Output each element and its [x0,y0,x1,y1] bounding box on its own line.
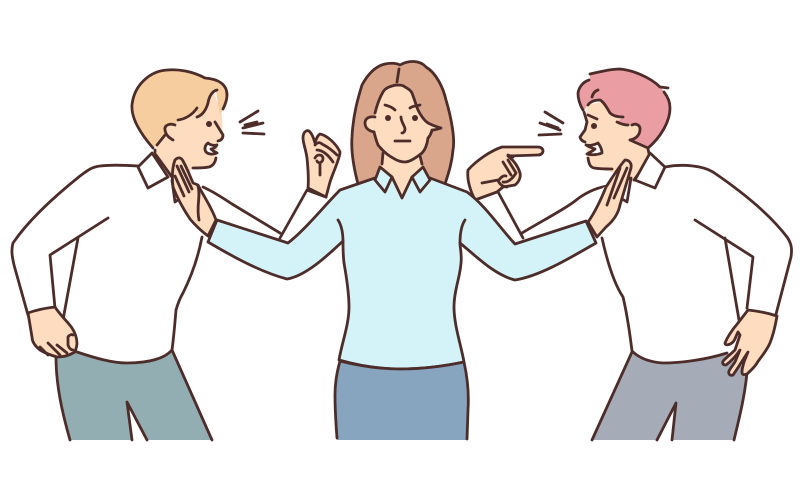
woman sweater body [208,178,596,369]
woman right hand on man's neck [588,160,631,237]
left man neck and face [155,88,223,182]
woman eyes [385,115,391,121]
left man ear [165,124,175,140]
right man arm behind woman [455,147,610,262]
woman neck [380,150,423,198]
left man collar [138,153,168,188]
right man collar [635,153,665,188]
left man hair [132,70,227,148]
right man neck and face [580,100,650,182]
right man mouth [586,143,602,155]
left man fist on hip [28,307,77,357]
shout lines left [240,111,264,134]
left man [12,70,345,440]
woman [172,61,631,440]
left man mouth [205,143,217,154]
right man hand on hip [723,310,777,375]
woman left hand on man's neck [172,158,216,236]
right man brow [588,115,597,119]
left man raised arm behind woman [200,131,345,262]
right man hair [578,69,670,148]
right man [455,69,792,440]
right man eye [591,123,597,129]
right man shirt [600,155,792,363]
woman armpit lines [338,220,465,243]
pointing hand [468,147,543,200]
raised fist [303,131,340,197]
left man pants [56,350,212,440]
woman brows nose mouth [385,105,420,141]
woman collar [375,167,430,192]
woman ear [365,117,375,132]
left man shirt [12,155,205,363]
woman face [374,85,441,162]
left man eye [206,121,212,127]
shout lines right [539,112,563,135]
right man pants [592,352,748,440]
woman long hair [352,61,454,184]
woman skirt [335,361,468,440]
woman parting [397,69,399,82]
right man ear [630,124,640,140]
